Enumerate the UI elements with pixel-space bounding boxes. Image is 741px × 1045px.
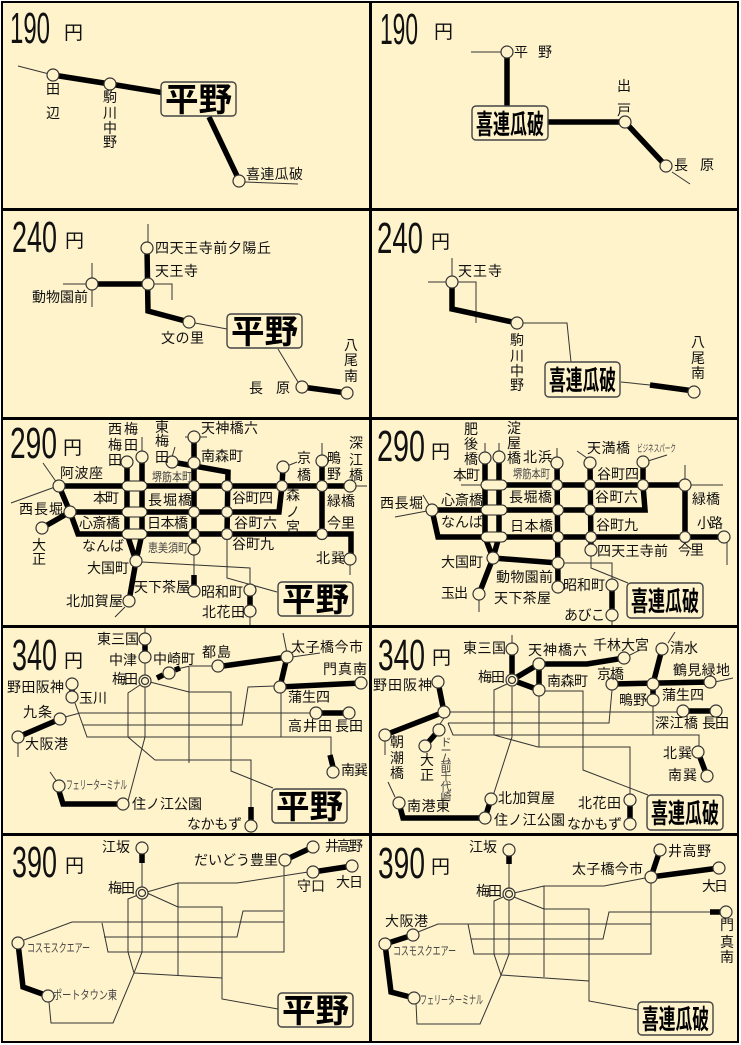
stations [446,276,700,398]
station labels: 梅田 [476,883,502,899]
station labels [19,419,363,620]
station labels: 堺筋本町 [513,466,550,481]
station labels [27,838,363,1002]
station labels: 南 [344,368,358,384]
station labels: 四天王寺前 [597,543,668,559]
station labels: 今里 [327,515,355,531]
station labels: 梅田 [112,671,138,687]
thick fare lines [18,639,361,822]
station labels: 深 [349,435,363,451]
station labels: 門 [720,917,734,933]
station labels [373,637,730,832]
station labels: 蒲生四 [288,689,330,705]
station labels: 都島 [202,644,231,660]
station box: Hirano: 平野 [276,788,343,825]
fare: 340 yen: 円 [64,651,83,672]
fare: 240 yen: 240 [377,214,423,263]
transfer pills [481,480,507,542]
panel: 390 yen from Hirano [3,836,369,1041]
station labels: 西長堀 [380,495,423,511]
station labels: 太子橋今市 [572,861,643,877]
station labels [32,240,358,396]
station labels: 代 [440,780,452,793]
station labels: 大 [32,537,46,553]
panel: 390 yen from Kire-Uriwari [372,836,737,1041]
station labels: 原 [276,380,290,396]
station labels: 北加賀屋 [498,790,555,806]
station labels: 潮 [390,750,404,766]
station labels: 玉川 [79,690,107,706]
station labels: 尾 [691,350,705,366]
station labels: 川 [510,348,524,364]
station box: Kire-Uriwari: 喜連瓜破 [549,366,616,396]
station labels: 喜連瓜破 [246,166,303,182]
thick fare lines [385,850,726,998]
station labels: 九条 [23,704,52,720]
station labels: 谷町六 [234,515,277,531]
station labels: 崎 [440,789,452,803]
station labels: 中崎町 [153,651,195,667]
station box: Hirano: 平野 [282,581,349,618]
station labels: 八 [691,334,705,350]
station labels: なかもず [567,816,622,832]
station box: Hirano: 平野 [165,81,232,118]
stations [12,841,358,1002]
station labels: 大国町 [441,554,483,570]
panel: 240 yen from Hirano [3,211,369,417]
station labels: 田 [155,449,169,465]
station labels: 森 [286,487,300,503]
station labels: 中 [103,120,117,136]
station labels: 堺筋本町 [152,469,192,484]
stations [86,242,353,399]
thin route lines [471,52,690,184]
station labels: 大日 [336,874,363,890]
thin route lines [18,66,298,184]
station labels: 屋 [507,435,521,451]
station labels: 駒 [510,332,524,348]
station labels: なかもず [187,816,242,832]
station labels: 北浜 [523,449,552,465]
station labels: 中津 [109,652,137,668]
station box: Hirano: 平野 [282,992,349,1029]
fare: 190 yen: 190 [10,4,50,53]
station labels: 田 [46,81,60,97]
station labels: なんば [82,538,124,554]
station labels: なんば [441,514,483,530]
station labels: 田 [124,437,138,453]
station labels: 駒 [103,89,117,105]
thick fare lines [385,649,716,824]
station labels: 井高野 [325,838,363,854]
station labels: 天満橋 [587,440,630,456]
stations [379,844,732,1004]
station labels: コスモスクエアー [393,944,456,958]
station labels: 橋 [390,765,404,781]
station labels: 北巽 [663,745,692,761]
station labels: 谷町四 [232,490,273,506]
station labels: 南巽 [668,767,697,783]
fare: 290 yen: 290 [10,419,57,468]
station labels: 長堀橋 [148,492,192,508]
station labels: 本町 [453,467,480,483]
thin route lines [385,632,733,797]
station labels: 梅田 [108,880,135,896]
station labels: 心斎橋 [79,515,120,531]
station labels: コスモスクエアー [27,941,90,955]
station labels: 正 [32,551,46,567]
thick fare lines [92,248,347,393]
station labels: 南森町 [201,448,243,464]
station box: Kire-Uriwari [472,106,548,140]
station labels: 阿波座 [60,465,103,481]
station labels: 八 [344,337,358,353]
station box: Kire-Uriwari: 喜連瓜破 [476,110,544,140]
station labels: 天王寺 [155,263,198,279]
station labels: 北花田 [578,795,621,811]
thin route lines [63,224,298,382]
station labels: 清水 [670,640,698,656]
station labels: 動物園前 [32,289,88,305]
station labels: 谷町九 [596,517,638,533]
panel: 290 yen from Hirano [3,419,369,625]
station labels: 四天王寺前夕陽丘 [155,240,271,256]
station labels: 橋 [297,467,311,483]
station labels: 野 [327,466,341,482]
station labels: 長田 [702,715,729,731]
station labels: 長田 [335,718,363,734]
station labels: 日本橋 [510,518,553,534]
station labels: 北加賀屋 [66,593,123,609]
panel: 340 yen from Hirano [3,628,369,833]
station labels: 中 [510,363,524,379]
station labels: 玉出 [441,585,468,601]
stations [379,643,722,830]
station labels: 天神橋六 [528,642,587,658]
thick fare lines [42,437,351,611]
station labels: あびこ [564,607,605,623]
station labels: 動物園前 [496,569,553,585]
station labels: 高井田 [288,718,332,734]
panel: 190 yen from Kire-Uriwari [372,3,737,208]
station labels: 朝 [390,734,404,750]
thin route lines [11,437,367,625]
station labels: 蒲生四 [662,687,704,703]
station labels: 日本橋 [147,515,188,531]
fare: 290 yen: 円 [431,442,450,463]
station labels [514,44,714,173]
station labels: 梅 [124,421,138,437]
station labels: 大阪港 [25,736,68,752]
fare: 240 yen: 円 [65,231,84,252]
station box: Kire-Uriwari [647,795,723,830]
station labels: 肥 [464,421,478,437]
fare: 390 yen: 390 [12,838,57,887]
station labels: 住ノ江公園 [494,812,565,828]
station labels: 鴫野 [619,692,647,708]
station labels: 大阪港 [385,913,428,929]
station labels: 守口 [297,878,325,894]
station labels: 深江橋 [655,715,698,731]
station labels: 大国町 [87,560,129,576]
station labels: 田 [108,452,122,468]
station labels: 昭和町 [201,584,243,600]
station labels: 江 [349,452,363,468]
thin route lines [416,864,710,1024]
fare: 340 yen: 円 [432,648,451,669]
thick fare lines [507,52,666,166]
station labels: 谷町六 [595,489,638,505]
transfer pills [122,481,147,539]
panel: 240 yen from Kire-Uriwari [372,211,737,417]
fare: 340 yen: 340 [12,631,57,680]
station labels: 京橋 [597,666,624,682]
thin route lines [24,863,308,1023]
station labels: 昭和町 [563,577,605,593]
fare: 290 yen: 290 [377,422,425,471]
station labels: 南森町 [547,673,588,689]
station labels: 南港東 [407,798,450,814]
station labels: 太子橋今市 [291,639,363,655]
station labels: 本町 [93,490,119,506]
station labels: 谷町九 [232,536,274,552]
station labels: 大 [420,752,434,768]
station labels: 淀 [507,420,521,436]
station labels: 尾 [344,352,358,368]
station labels: 野 [538,44,552,60]
station box: Hirano: 平野 [231,313,298,350]
station labels: 天下茶屋 [134,579,190,595]
station labels: ポートタウン東 [53,988,117,1002]
station labels: 梅 [108,437,122,453]
station labels: 長 [249,380,263,396]
station labels: 門真南 [323,661,367,677]
station labels [380,420,723,623]
panel: 290 yen from Kire-Uriwari [372,420,737,625]
thin route lines [428,258,650,385]
station labels: 東三国 [97,631,139,647]
station labels: 天下茶屋 [494,590,551,606]
station box: Kire-Uriwari [638,1002,713,1035]
station labels: 前 [440,760,452,774]
station labels: 恵美須町 [148,541,188,555]
station labels: 野田阪神 [373,677,432,693]
station labels: 野田阪神 [7,679,64,695]
station labels: 千林大宮 [593,637,649,653]
thick fare lines [18,847,352,996]
station labels: 天王寺 [458,263,502,279]
station labels: ー [440,745,452,757]
station labels: 北巽 [316,550,345,566]
station labels: 南巽 [341,762,368,778]
station labels: 緑橋 [327,493,355,509]
station labels: 長堀橋 [509,489,552,505]
station labels: 江坂 [469,839,497,855]
station labels: 井高野 [668,843,711,859]
station labels: 京 [297,450,311,466]
station labels: 長 [674,157,688,173]
stations [12,633,367,832]
stations [36,431,356,617]
thick fare lines [452,282,694,391]
fare: 390 yen: 390 [378,839,425,888]
station box: Kire-Uriwari [545,362,620,397]
station labels [458,263,705,393]
fare: 190 yen: 190 [380,5,418,54]
fare: 390 yen: 円 [431,857,450,878]
station labels: 橋 [507,450,521,466]
stations [426,451,730,621]
fare: 240 yen: 240 [12,213,57,262]
station labels: 原 [700,157,714,173]
station labels: 緑橋 [692,491,720,507]
station labels: 野 [103,134,117,150]
station labels: 南 [691,365,705,381]
station labels: フェリーターミナル [420,993,483,1007]
station labels: フェリーターミナル [66,778,127,792]
station labels: 出 [617,78,631,94]
station labels: 西長堀 [19,501,63,517]
fare: 190 yen: 円 [64,23,83,44]
station labels [7,631,368,832]
station labels: 梅田 [478,669,505,685]
station labels: 北花田 [202,604,245,620]
fare: 340 yen: 340 [378,631,425,680]
stations [501,46,672,172]
station labels: 辺 [46,105,60,121]
stations [47,69,245,187]
thick fare lines [432,457,724,615]
station labels: 西 [108,421,122,437]
station labels: 東三国 [463,640,506,656]
station labels: 梅 [155,433,169,449]
station labels: 心斎橋 [441,492,483,508]
station labels: 東 [155,419,169,435]
station labels: 川 [103,105,117,121]
station labels: 天神橋六 [201,420,258,436]
fare: 240 yen: 円 [431,232,450,253]
fare: 190 yen: 円 [434,22,453,43]
thin route lines [395,443,727,625]
station labels: 江坂 [102,839,130,855]
station labels: 谷町四 [597,466,639,482]
station labels: ノ [286,504,300,520]
panel: 340 yen from Kire-Uriwari [372,628,737,833]
station labels: 大日 [702,878,728,894]
station labels: 真 [720,934,734,950]
fare: 290 yen: 円 [63,438,82,459]
station labels [385,839,734,1007]
station labels: 野 [510,377,524,393]
fare: 390 yen: 円 [65,856,84,877]
station labels: 文の里 [161,330,204,346]
station labels: 小路 [697,515,723,531]
station labels: だいどう豊里 [194,852,278,868]
station labels: 橋 [464,451,478,467]
station labels: 宮 [286,519,300,535]
station labels: ビジネスパーク [637,443,676,455]
station labels: 正 [420,767,434,783]
station labels: 鴫 [327,450,341,466]
station labels: 橋 [349,467,363,483]
station labels: ム [440,752,452,765]
station box: Kire-Uriwari [627,583,703,618]
station labels [46,81,303,182]
station labels: 南 [720,949,734,965]
station labels: 住ノ江公園 [132,796,202,812]
thick fare lines [53,75,239,180]
station labels: ド [440,737,452,749]
station labels: 後 [464,436,478,452]
station labels: 鶴見緑地 [673,662,730,678]
station box: Kire-Uriwari: 喜連瓜破 [631,587,699,617]
station labels: 平 [514,44,528,60]
thin route lines [18,628,331,807]
station labels: 千 [440,770,452,783]
station labels: 今里 [678,542,704,558]
station labels: 戸 [617,102,631,118]
panel: 190 yen from Hirano [3,3,369,208]
